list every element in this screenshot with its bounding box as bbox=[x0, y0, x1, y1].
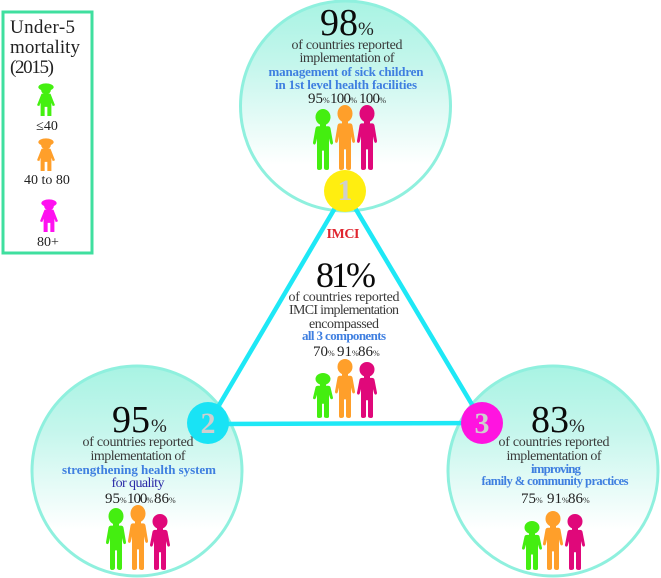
percentages by mortality group: 70% bbox=[313, 344, 335, 360]
badge 2 bbox=[187, 402, 229, 444]
child icons bbox=[313, 359, 377, 418]
legend icon: green child bbox=[37, 83, 55, 116]
percentages by mortality group bbox=[313, 344, 380, 360]
badge 1: 1 bbox=[338, 174, 352, 207]
description: strengthening health system bbox=[62, 462, 216, 477]
description bbox=[482, 435, 629, 488]
percentages by mortality group: 100% bbox=[330, 91, 357, 107]
circle: component 3 background bbox=[448, 366, 658, 576]
description: management of sick children bbox=[268, 64, 424, 79]
description: of countries reported bbox=[498, 435, 610, 450]
panel: component 2 content bbox=[62, 399, 216, 570]
description: implementation of bbox=[506, 449, 602, 464]
legend heading: (2015) bbox=[10, 57, 54, 78]
child icons bbox=[106, 505, 170, 570]
legend icon: orange child bbox=[37, 138, 55, 171]
description: in 1st level health facilities bbox=[275, 77, 417, 92]
headline 83%: 83% bbox=[531, 399, 585, 441]
legend heading bbox=[10, 17, 80, 78]
percentages by mortality group: 86% bbox=[154, 491, 176, 507]
description: encompassed bbox=[309, 317, 379, 332]
description: of countries reported bbox=[292, 38, 402, 53]
percentages by mortality group: 86% bbox=[568, 491, 590, 507]
description bbox=[288, 290, 400, 343]
badge 2: 2 bbox=[200, 407, 216, 440]
legend heading: Under-5 bbox=[10, 17, 75, 38]
panel: legend under-5 mortality bbox=[3, 12, 92, 253]
panel: center content bbox=[288, 255, 400, 418]
legend icon: magenta child bbox=[40, 199, 58, 232]
headline 81%: 81% bbox=[316, 255, 376, 295]
legend heading: mortality bbox=[10, 37, 80, 58]
description bbox=[268, 38, 424, 92]
description: of countries reported bbox=[82, 435, 194, 450]
triangle connecting the three components bbox=[208, 191, 483, 424]
legend label: 40 to 80: 40 to 80 bbox=[24, 173, 70, 188]
description bbox=[62, 435, 216, 491]
percentages by mortality group: 100% bbox=[359, 91, 386, 107]
headline 95%: 95% bbox=[112, 399, 167, 441]
headline 98%: 98% bbox=[320, 2, 374, 44]
percentages by mortality group bbox=[521, 491, 590, 507]
description: of countries reported bbox=[288, 290, 400, 305]
label IMCI: IMCI bbox=[326, 227, 360, 242]
badge 3 bbox=[461, 402, 503, 444]
description: all 3 components bbox=[302, 328, 386, 343]
description: for quality bbox=[112, 476, 164, 491]
description: IMCI implementation bbox=[289, 303, 399, 318]
description: implementation of bbox=[300, 51, 395, 66]
badge 1 bbox=[324, 170, 366, 212]
percentages by mortality group: 95% bbox=[308, 91, 330, 107]
percentages by mortality group bbox=[105, 491, 176, 507]
badge 3: 3 bbox=[474, 407, 490, 440]
legend label: 40 or less: ≤40 bbox=[36, 119, 58, 134]
child icons bbox=[522, 511, 585, 570]
panel: component 3 content bbox=[482, 399, 629, 570]
percentages by mortality group: 95% bbox=[105, 491, 127, 507]
percentages by mortality group: 86% bbox=[358, 344, 380, 360]
legend label: 80 plus: 80+ bbox=[37, 235, 59, 250]
child icons bbox=[313, 105, 377, 170]
percentages by mortality group: 75% bbox=[521, 491, 543, 507]
description: family & community practices bbox=[482, 474, 629, 488]
panel: component 1 content bbox=[268, 2, 424, 170]
percentages by mortality group: 91% bbox=[337, 344, 359, 360]
circle: component 1 background bbox=[240, 1, 450, 211]
circle: component 2 background bbox=[32, 366, 242, 576]
percentages by mortality group bbox=[308, 91, 386, 107]
description: improving bbox=[531, 461, 582, 476]
percentages by mortality group: 91% bbox=[547, 491, 569, 507]
percentages by mortality group: 100% bbox=[127, 491, 153, 507]
description: implementation of bbox=[90, 449, 186, 464]
